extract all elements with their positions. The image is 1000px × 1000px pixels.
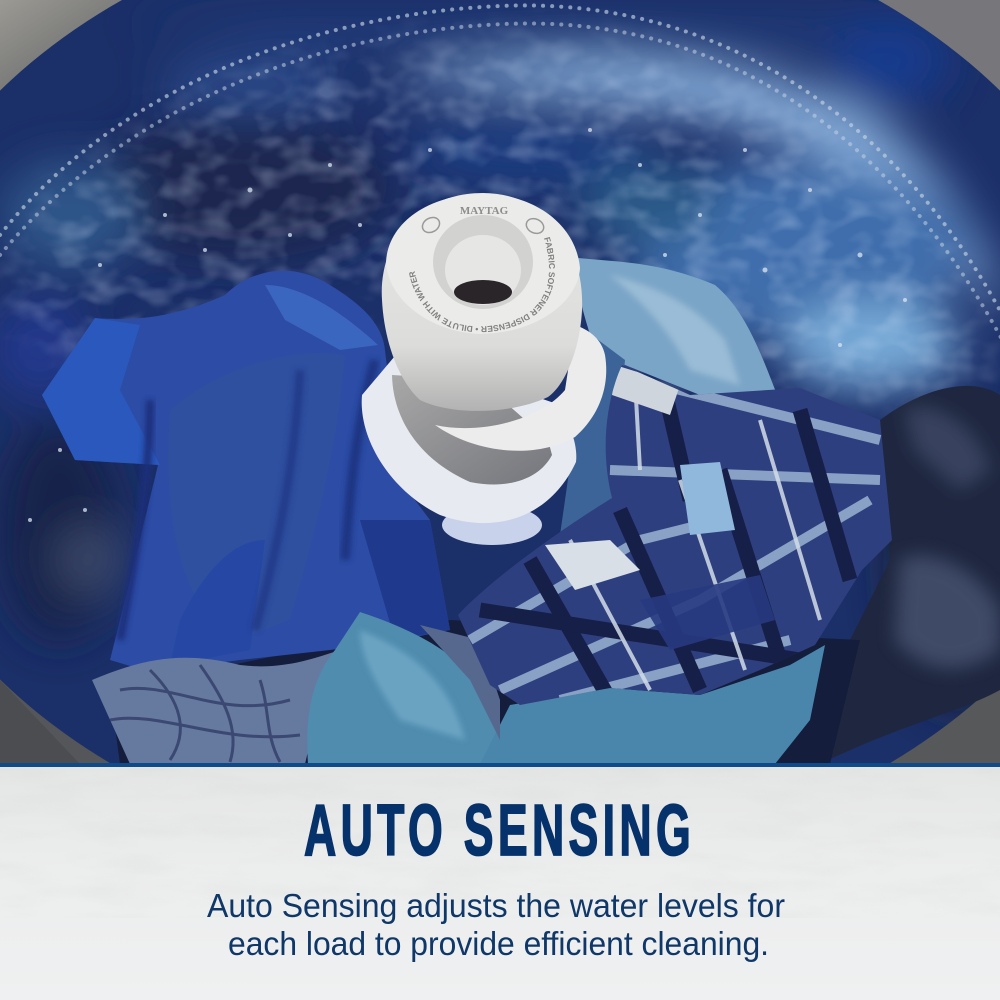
cloth: plaid flannel — [458, 365, 892, 705]
tub bead rows — [0, 5, 1000, 345]
care symbols — [422, 216, 544, 234]
cloth: bottom centre-left patterned shirt — [92, 650, 340, 764]
dispenser: central column — [392, 375, 552, 484]
accent rule — [0, 763, 1000, 767]
dispenser: top face — [386, 197, 580, 334]
body text: Auto Sensing adjusts the water levels for — [207, 887, 785, 924]
washer rim — [0, 0, 1000, 764]
cloth: dark shadow under laundry — [110, 620, 860, 764]
dispenser ring label: FABRIC SOFTENER DISPENSER • DILUTE WITH WATER — [409, 237, 555, 332]
dispenser: upper white fin — [435, 325, 606, 451]
photo: washer tub with laundry — [0, 0, 1000, 763]
tub water — [0, 0, 1000, 764]
cloth: bottom teal shirt — [307, 612, 825, 764]
dispenser: lower white fin — [362, 350, 576, 523]
panel: caption — [0, 763, 1000, 1000]
water droplets — [28, 128, 937, 522]
dispenser: base cap — [442, 512, 542, 545]
water ripple texture — [0, 28, 999, 404]
dispenser: body — [382, 193, 582, 411]
title: AUTO SENSING — [304, 791, 695, 871]
cloth: upper right light blue shirt — [560, 258, 782, 535]
body text — [207, 887, 785, 962]
cloth: left blue shirt — [42, 271, 450, 672]
cloth: right dark garment — [820, 386, 1000, 764]
body text: each load to provide efficient cleaning. — [228, 925, 769, 962]
logo text: MAYTAG — [460, 205, 509, 217]
